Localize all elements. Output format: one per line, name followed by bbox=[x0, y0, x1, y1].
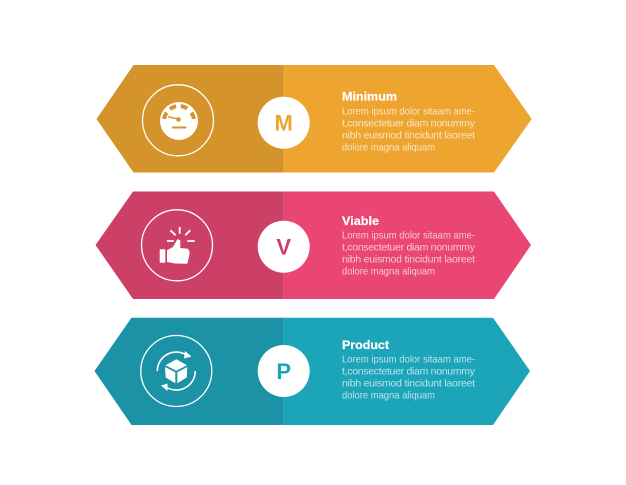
icon: thumbs up bbox=[142, 210, 212, 281]
text: product: dolore magna aliquam bbox=[342, 390, 435, 402]
text: viable: Viable bbox=[342, 214, 379, 228]
banner left bbox=[96, 65, 284, 172]
text: product: Product bbox=[342, 338, 389, 352]
letter badge V bbox=[258, 221, 310, 273]
text: product: nibh euismod tincidunt laoreet bbox=[342, 378, 475, 390]
text: viable: Lorem ipsum dolor sitaam ame- bbox=[342, 230, 475, 242]
letter badge P: P bbox=[276, 359, 291, 384]
banner right bbox=[284, 318, 530, 425]
icon: speedometer bbox=[142, 85, 214, 156]
text: product bbox=[342, 338, 476, 402]
banner left bbox=[94, 318, 284, 425]
text: minimum: dolore magna aliquam bbox=[342, 141, 435, 153]
panel: minimum bbox=[96, 65, 532, 172]
text: minimum: t,consectetuer diam nonummy bbox=[342, 117, 476, 129]
text: viable: dolore magna aliquam bbox=[342, 266, 435, 278]
text: minimum: nibh euismod tincidunt laoreet bbox=[342, 129, 475, 141]
letter badge M: M bbox=[275, 110, 293, 136]
text: minimum bbox=[342, 90, 476, 153]
banner right bbox=[284, 65, 532, 172]
text: viable: t,consectetuer diam nonummy bbox=[342, 242, 476, 254]
letter badge P bbox=[258, 345, 310, 397]
text: viable bbox=[342, 214, 476, 278]
icon: box with cycle arrows bbox=[141, 336, 212, 406]
text: product: Lorem ipsum dolor sitaam ame- bbox=[342, 354, 475, 366]
letter badge V: V bbox=[276, 234, 291, 260]
panel: viable bbox=[96, 192, 531, 299]
banner left bbox=[96, 192, 284, 299]
banner right bbox=[284, 192, 531, 299]
text: product: t,consectetuer diam nonummy bbox=[342, 366, 476, 378]
text: minimum: Lorem ipsum dolor sitaam ame- bbox=[342, 105, 475, 117]
text: minimum: Minimum bbox=[342, 90, 397, 104]
text: viable: nibh euismod tincidunt laoreet bbox=[342, 254, 475, 266]
letter badge M bbox=[258, 97, 310, 149]
panel: product bbox=[94, 318, 530, 425]
